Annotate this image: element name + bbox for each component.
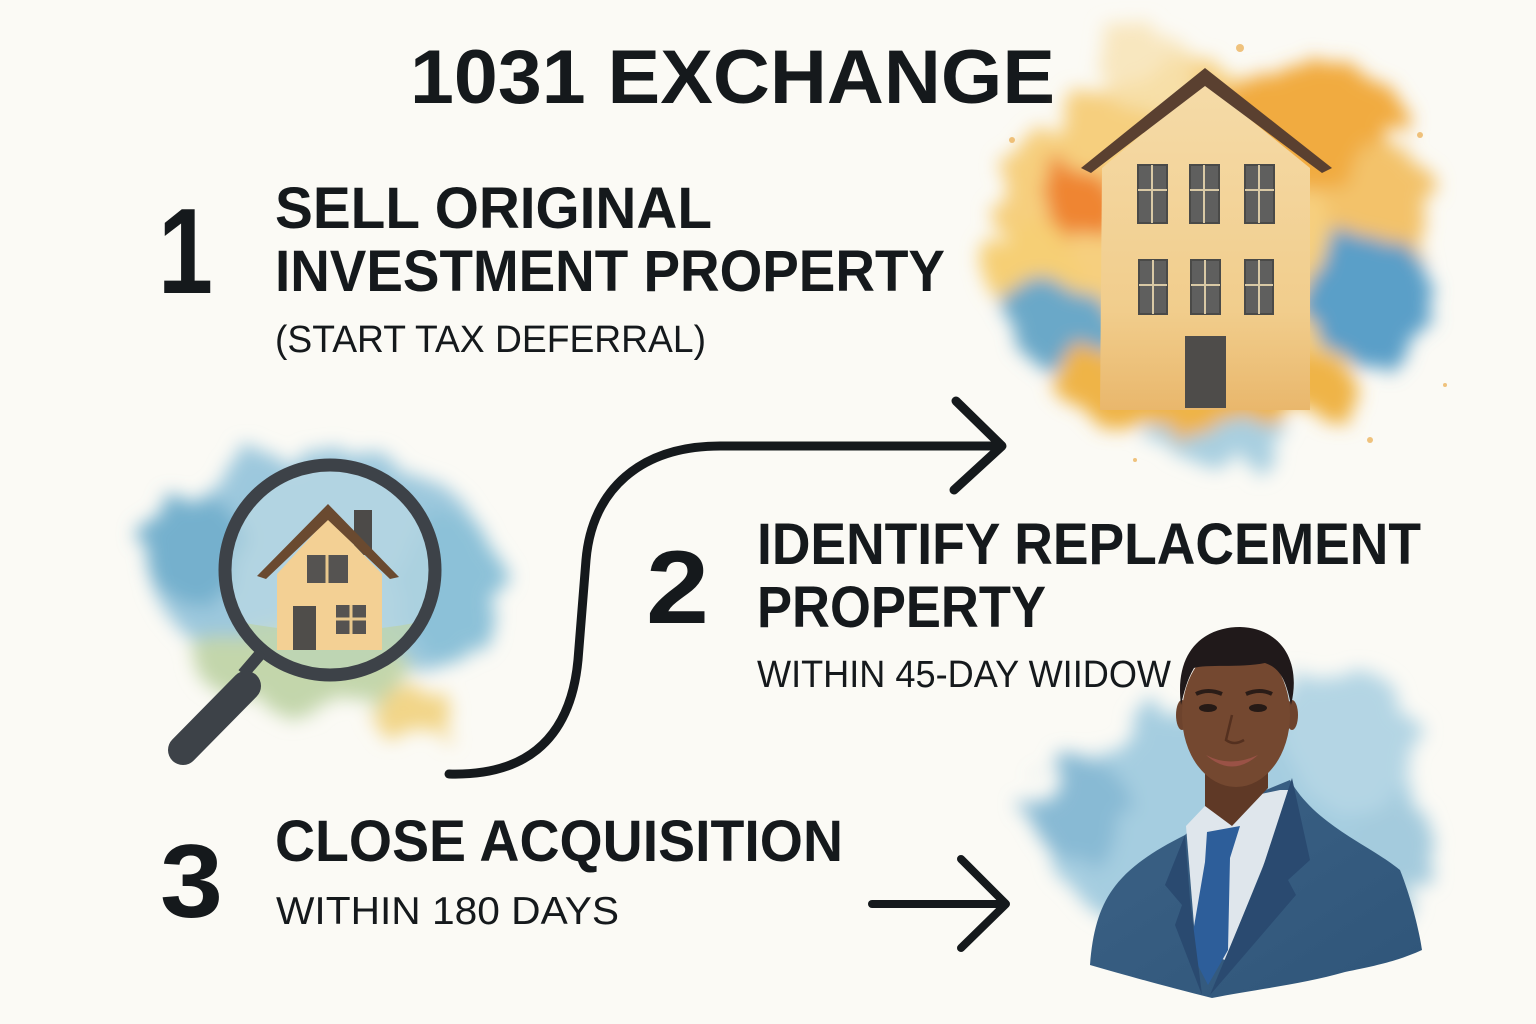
eyes and mouth [1196, 691, 1272, 766]
face [1182, 643, 1290, 787]
lens glass [226, 466, 434, 674]
step 3 text: WITHIN 180 DAYS [276, 890, 619, 933]
watercolor splash: advisor [1035, 670, 1430, 955]
step 2 text: PROPERTY [757, 575, 1046, 640]
step 1 number: 1 [158, 183, 213, 319]
lens ground [240, 622, 420, 674]
step 2 text: WITHIN 45-DAY WIIDOW [757, 654, 1171, 696]
step 1 text: SELL ORIGINAL [275, 176, 712, 241]
watercolor splash: search [145, 450, 498, 736]
step 1 text: INVESTMENT PROPERTY [275, 239, 945, 304]
step 2 text [757, 512, 1421, 696]
lapels [1165, 778, 1310, 995]
hair [1180, 627, 1294, 705]
illustration: magnifying glass over house [145, 450, 498, 750]
step 3 text [275, 809, 843, 933]
icon: small house [257, 504, 399, 650]
step 2 text: IDENTIFY REPLACEMENT [757, 512, 1421, 577]
ears [1176, 700, 1298, 730]
neck [1205, 755, 1268, 826]
tie [1190, 826, 1240, 985]
step 3 text: CLOSE ACQUISITION [275, 809, 843, 874]
step 1 text: (START TAX DEFERRAL) [275, 319, 706, 361]
curved arrow to house [449, 401, 1002, 774]
illustration: large house with watercolor [985, 35, 1447, 462]
illustration: advisor portrait [1035, 627, 1430, 998]
straight arrow to advisor [872, 859, 1006, 948]
step 3 number: 3 [160, 824, 223, 940]
icon: house [1081, 68, 1332, 410]
step 1 text [275, 176, 945, 361]
step 2 number: 2 [646, 530, 709, 646]
paint specks [1009, 44, 1447, 462]
suit jacket [1090, 780, 1422, 998]
icon: magnifying glass [183, 465, 435, 750]
shirt [1186, 790, 1294, 960]
watercolor splash: house [985, 35, 1440, 460]
title: 1031 EXCHANGE [410, 35, 1055, 120]
